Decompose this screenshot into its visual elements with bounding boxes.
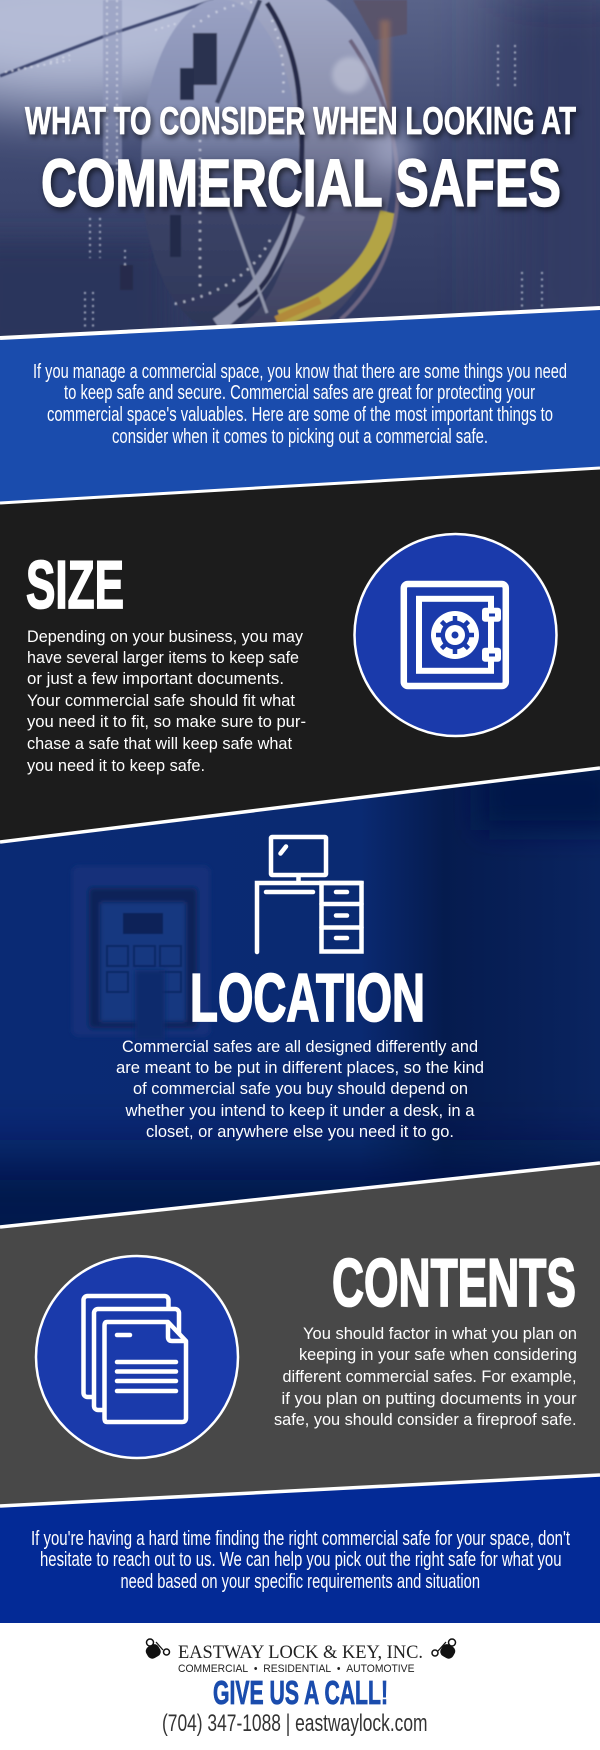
panel: intro <box>0 308 600 503</box>
panel: contents background <box>0 1163 600 1506</box>
title <box>25 100 576 221</box>
logo: eastway lock and key <box>144 1639 457 1675</box>
text: location body: whether you intend to keep it under a desk, in a <box>124 1102 475 1120</box>
heading: call to action: GIVE US A CALL! <box>213 1674 388 1711</box>
panel: size background <box>0 468 600 842</box>
door <box>141 0 299 331</box>
text: size body: chase a safe that will keep safe what <box>27 735 292 753</box>
logo: eastway lock and key: EASTWAY LOCK & KEY, INC. <box>178 1643 423 1663</box>
text: location body: closet, or anywhere else you need it to go. <box>146 1123 454 1141</box>
text: contents body: keeping in your safe when considering <box>299 1346 577 1364</box>
text: location body: of commercial safe you buy should depend on <box>133 1080 468 1098</box>
icon: documents in circle <box>36 1256 238 1458</box>
panel: closing call to action <box>0 1475 600 1623</box>
text: size body: Your commercial safe should fit what <box>27 692 295 710</box>
text: location body <box>116 1038 484 1141</box>
text: contents body: You should factor in what you plan on <box>303 1325 577 1343</box>
text: size body: Depending on your business, you may <box>27 628 304 646</box>
drum <box>244 0 392 324</box>
handles and rods <box>193 33 217 85</box>
text: contents body <box>274 1325 577 1429</box>
icon: desk with monitor <box>257 837 362 952</box>
panel: hero vault photo <box>0 0 600 360</box>
text: contents body: safe, you should consider a fireproof safe. <box>274 1411 576 1429</box>
heading: size: SIZE <box>26 547 124 623</box>
copper bracket <box>353 0 407 40</box>
icon: right padlock and key <box>432 1639 457 1661</box>
text: size body: have several larger items to keep safe <box>27 649 299 667</box>
text: size body: you need it to keep safe. <box>27 757 205 775</box>
text: location body: are meant to be put in different places, so the kind <box>116 1059 484 1077</box>
text: closing message: need based on your specific requirements and situation <box>120 1571 480 1593</box>
text: closing message <box>31 1528 570 1593</box>
text: size body: you need it to fit, so make sure to pur- <box>27 713 306 731</box>
text: contact details: (704) 347-1088 | eastwaylock.com <box>162 1710 428 1737</box>
heading: location: LOCATION <box>190 960 425 1036</box>
intro text <box>33 361 567 448</box>
panel: location photo background <box>0 760 600 1260</box>
text: size body <box>27 628 306 775</box>
panel: footer <box>0 1623 600 1750</box>
logo: eastway lock and key: COMMERCIAL • RESIDENTIAL • AUTOMOTIVE <box>178 1663 414 1675</box>
text: size body: or just a few important documents. <box>27 670 284 688</box>
text: contents body: different commercial safes. For example, <box>282 1368 576 1386</box>
icon: safe in circle <box>354 534 556 736</box>
text: location body: Commercial safes are all designed differently and <box>122 1038 478 1056</box>
icon: left padlock and key <box>144 1639 170 1661</box>
text: contents body: if you plan on putting documents in your <box>282 1390 577 1408</box>
